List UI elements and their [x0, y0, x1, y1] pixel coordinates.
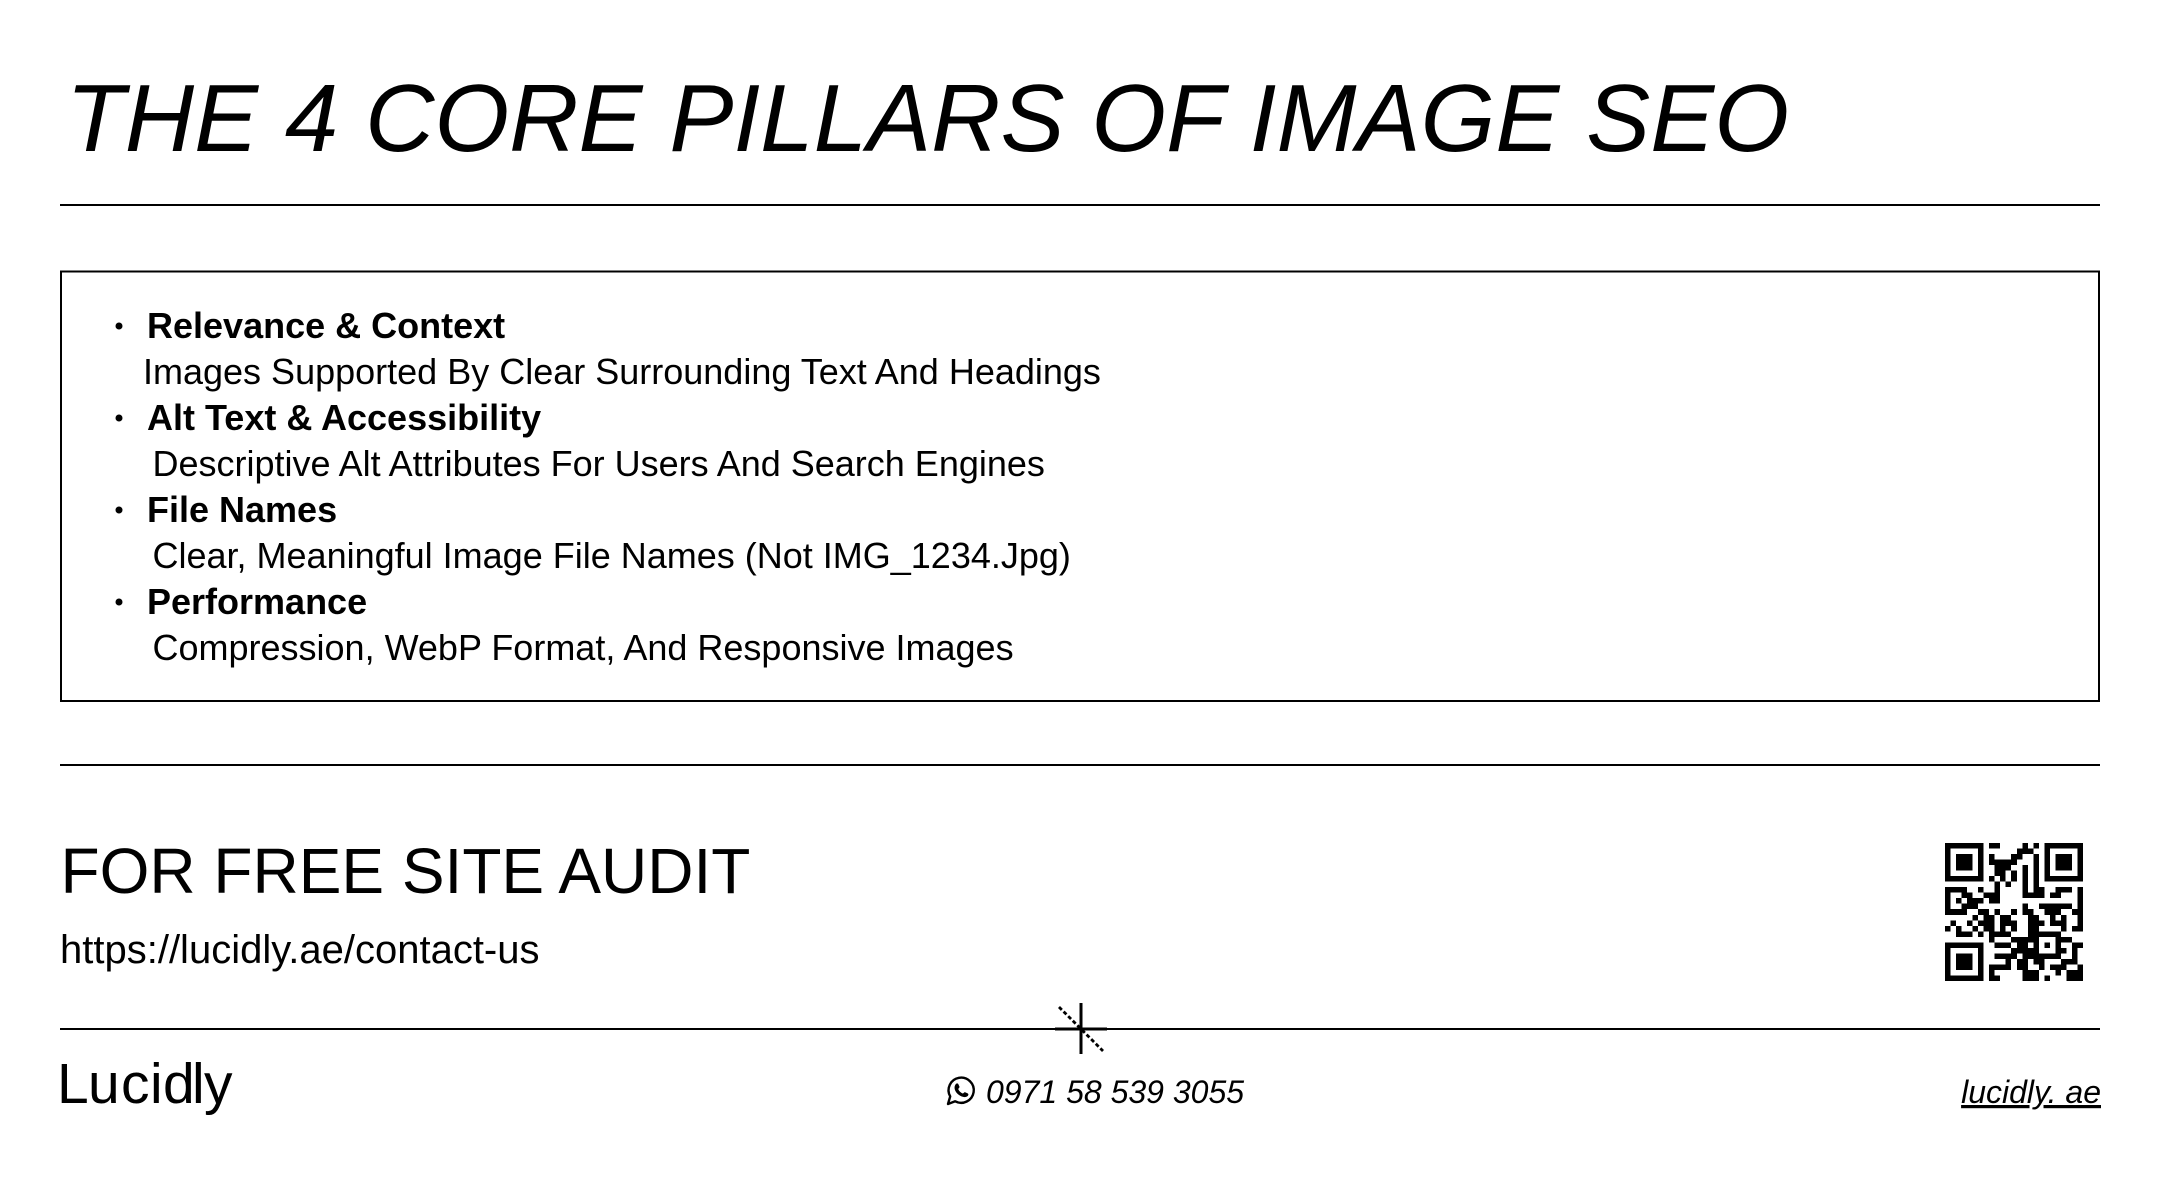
- call to action heading: FOR FREE SITE AUDIT: [60, 835, 750, 907]
- pillar: alt text and accessibility: Alt Text & Accessibility: [147, 397, 541, 438]
- pillar: relevance and context: Images Supported By Clear Surrounding Text And Headings: [143, 351, 1101, 392]
- pillar: alt text and accessibility: Descriptive Alt Attributes For Users And Search Engines: [152, 443, 1045, 484]
- phone number: 0971 58 539 3055: [986, 1074, 1244, 1110]
- pillar: alt text and accessibility: [116, 397, 1045, 484]
- pillar: performance: Performance: [147, 581, 367, 622]
- pillar: performance: [116, 581, 1014, 668]
- pillar: performance: Compression, WebP Format, And Responsive Images: [152, 627, 1014, 668]
- pillar: file names: File Names: [147, 489, 337, 530]
- qr code: [1945, 843, 2083, 981]
- website link: lucidly. ae: [1961, 1074, 2101, 1110]
- contact url: https://lucidly.ae/contact-us: [60, 928, 540, 972]
- pillar: relevance and context: [116, 305, 1101, 392]
- pillar: relevance and context: Relevance & Context: [147, 305, 505, 346]
- icon: whatsapp: [948, 1078, 974, 1104]
- title: THE 4 CORE PILLARS OF IMAGE SEO: [66, 65, 1789, 172]
- pillar: file names: [116, 489, 1071, 576]
- logo: Lucidly: Lucidly: [57, 1052, 233, 1116]
- panel: four pillars list: [61, 272, 2099, 701]
- icon: star cross on divider: [1055, 1003, 1107, 1054]
- pillar: file names: Clear, Meaningful Image File Names (Not IMG_1234.Jpg): [152, 535, 1071, 576]
